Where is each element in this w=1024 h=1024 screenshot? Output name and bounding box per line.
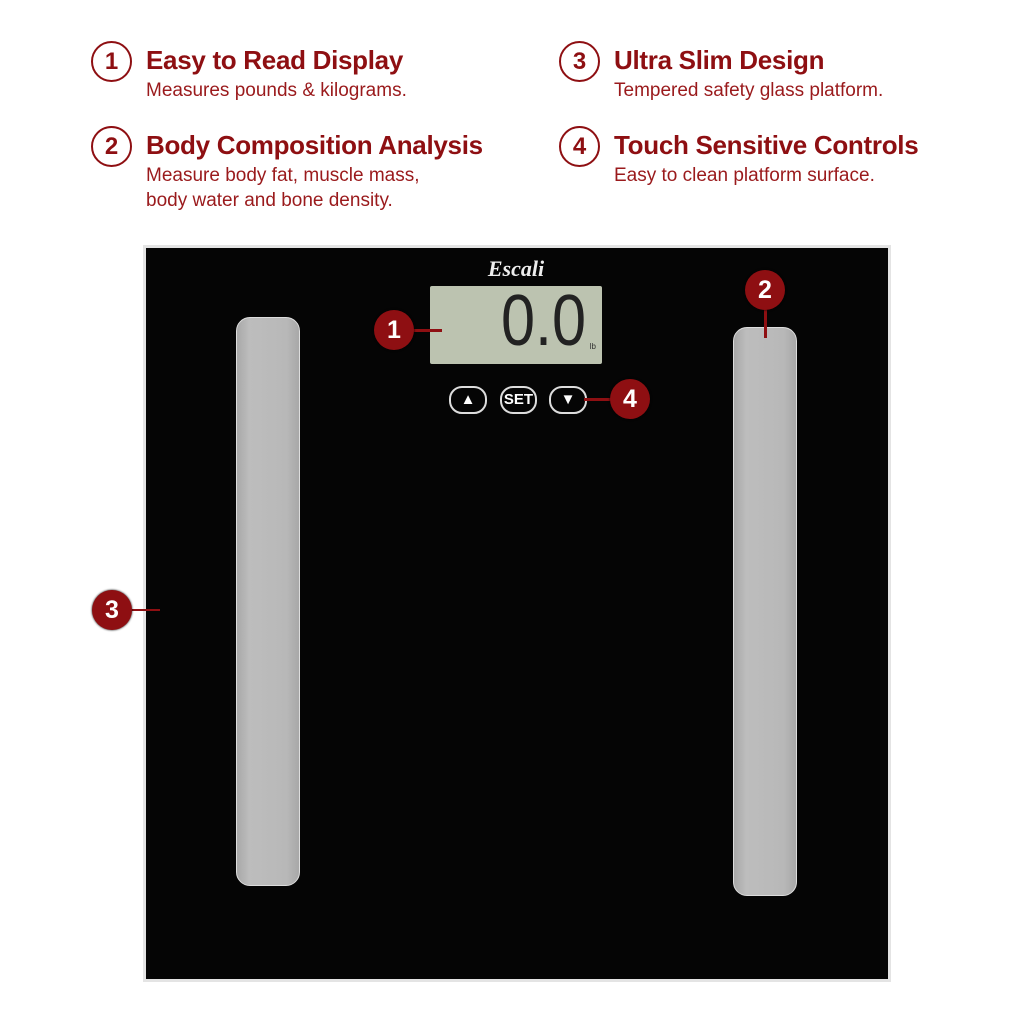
text 2: Measure body fat, muscle mass, — [146, 165, 420, 186]
electrode right — [733, 327, 797, 896]
feature 2 — [91, 126, 483, 211]
icon: number 2: 2 — [105, 133, 118, 160]
buttons: ▲ — [461, 391, 475, 408]
heading 3: Ultra Slim Design — [614, 45, 824, 75]
heading 1: Easy to Read Display — [146, 45, 403, 75]
heading 2: Body Composition Analysis — [146, 130, 483, 160]
text 3: Tempered safety glass platform. — [614, 80, 883, 101]
scale — [143, 245, 891, 982]
callout 2: 2 — [758, 276, 772, 304]
heading 4: Touch Sensitive Controls — [614, 130, 918, 160]
callout 1: 1 — [387, 316, 401, 344]
LCD display — [430, 286, 602, 364]
icon: number 3 — [559, 41, 600, 82]
scale: SET — [504, 391, 533, 408]
logo: Escali — [488, 256, 544, 281]
icon: number 4 — [559, 126, 600, 167]
scale: ▼ — [561, 391, 575, 408]
icon: number 3: 3 — [573, 48, 586, 75]
text 1: Measures pounds & kilograms. — [146, 80, 407, 101]
text 2 — [146, 165, 420, 211]
feature 1 — [91, 41, 407, 101]
callout 2 — [745, 270, 785, 338]
icon: number 2 — [91, 126, 132, 167]
icon: number 1: 1 — [105, 48, 118, 75]
LCD display: lb — [590, 342, 596, 351]
callout 1 — [374, 310, 442, 350]
icon: number 4: 4 — [573, 133, 586, 160]
callout 3: 3 — [105, 596, 119, 624]
text 4: Easy to clean platform surface. — [614, 165, 875, 186]
icon: number 1 — [91, 41, 132, 82]
callout 4 — [584, 379, 650, 419]
callout 4: 4 — [623, 385, 637, 413]
text 2: body water and bone density. — [146, 190, 393, 211]
buttons — [449, 386, 487, 414]
electrode left — [236, 317, 300, 886]
feature 4 — [559, 126, 918, 186]
feature 3 — [559, 41, 883, 101]
